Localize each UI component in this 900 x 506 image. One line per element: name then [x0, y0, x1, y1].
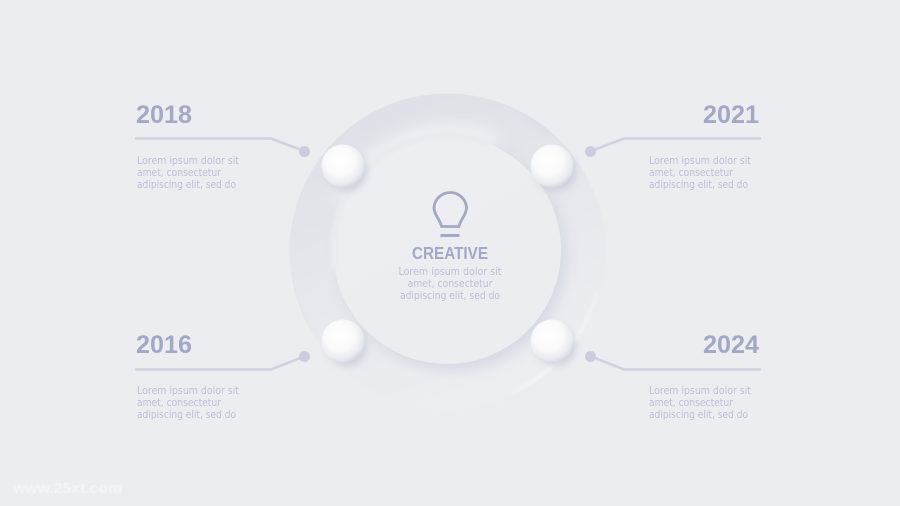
- central disc: [290, 94, 570, 372]
- item: 2016: Lorem ipsum dolor sit: [137, 385, 239, 397]
- item: 2018: 2018: [136, 101, 192, 129]
- item: 2024: amet, consectetur: [649, 397, 734, 409]
- item: 2021: amet, consectetur: [649, 167, 734, 179]
- ball: bottom left: [322, 320, 367, 366]
- item: 2018: Lorem ipsum dolor sit: [137, 155, 239, 167]
- item: 2016: [135, 331, 310, 421]
- item: 2024: Lorem ipsum dolor sit: [649, 385, 751, 397]
- item: 2016: adipiscing elit, sed do: [137, 409, 236, 421]
- outer ring: [290, 94, 606, 410]
- center text: Lorem ipsum dolor sit: [398, 266, 502, 278]
- ball: top right: [530, 144, 576, 191]
- item: 2024: [585, 331, 761, 421]
- item: 2016: amet, consectetur: [137, 397, 222, 409]
- item: 2024: 2024: [703, 331, 759, 359]
- item: 2018: [135, 101, 310, 191]
- item: 2024: adipiscing elit, sed do: [649, 409, 748, 421]
- inner circle: [333, 136, 561, 364]
- inner circle soft top-left blend: [333, 136, 490, 270]
- item: 2021: 2021: [703, 101, 759, 129]
- ring shading: [356, 126, 568, 372]
- item: 2021: [585, 101, 761, 191]
- ball: top left: [322, 144, 367, 191]
- center title: CREATIVE: [412, 243, 488, 263]
- item: 2018: adipiscing elit, sed do: [137, 179, 236, 191]
- item: 2021: Lorem ipsum dolor sit: [649, 155, 751, 167]
- icon: light bulb: [434, 192, 466, 236]
- center text: amet, consectetur: [408, 278, 493, 290]
- item: 2018: amet, consectetur: [137, 167, 222, 179]
- center text: adipiscing elit, sed do: [400, 290, 500, 302]
- watermark: www.25xt.com: [12, 480, 122, 497]
- ball: bottom right: [530, 320, 576, 366]
- item: 2021: adipiscing elit, sed do: [649, 179, 748, 191]
- item: 2016: 2016: [136, 331, 192, 359]
